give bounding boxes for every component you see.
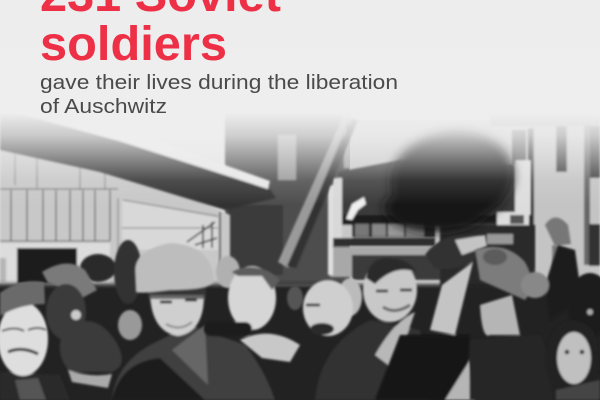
middle brick building xyxy=(225,100,374,285)
left barrack wall xyxy=(0,150,230,290)
man behind in cap, smiling xyxy=(204,266,300,362)
main soldier in fur hat xyxy=(112,243,275,400)
background heads behind soldier xyxy=(80,240,362,340)
diagonal pole xyxy=(278,112,358,268)
smiling man with short hair xyxy=(315,258,430,400)
central structure with dark roof and windows xyxy=(328,160,535,290)
subtitle line 1: gave their lives during the liberation xyxy=(40,71,398,94)
white fade over upper photograph xyxy=(0,0,600,205)
woman at lower right xyxy=(545,320,600,400)
headline line 2: soldiers xyxy=(40,18,227,71)
raised arm with fist xyxy=(375,235,487,400)
right building xyxy=(490,112,600,285)
raised fur hat, blurred xyxy=(383,120,521,236)
second man seen from behind with bag xyxy=(42,263,122,388)
crowd at right with hat raised xyxy=(521,218,600,337)
back wall right of centre xyxy=(350,120,540,270)
cap seen from behind and back of head xyxy=(470,247,555,400)
subtitle line 2: of Auschwitz xyxy=(40,95,167,118)
man on the left with cap xyxy=(0,281,70,400)
crowd shadow xyxy=(0,284,600,400)
photograph: liberation of Auschwitz xyxy=(0,100,600,400)
barrack roof xyxy=(0,100,276,210)
bald man xyxy=(303,280,353,336)
